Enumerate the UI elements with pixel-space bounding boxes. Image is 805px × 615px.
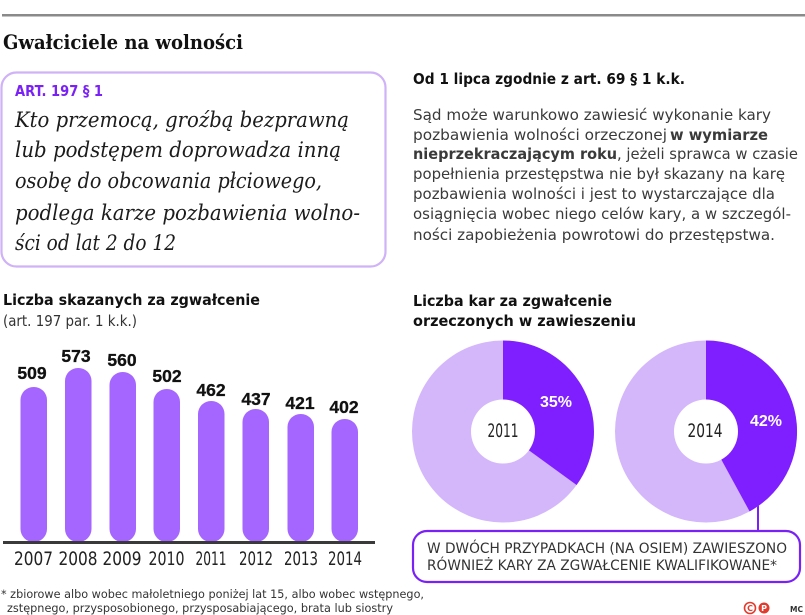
bar values: 402 (329, 397, 359, 417)
pie chart 2011 (412, 340, 594, 522)
text block: art. 69 explanation: ności zapobieżenia powrotowi do przestępstwa. (413, 226, 775, 244)
bar 2013 (288, 414, 314, 542)
bar values (17, 346, 359, 417)
pie chart 2014 (615, 340, 797, 522)
footnote: zstępnego, przysposobionego, przysposabiającego, brata lub siostry (7, 601, 393, 615)
year labels: 2007 (14, 549, 53, 570)
heading: pie charts: orzeczonych w zawieszeniu (413, 312, 636, 330)
title: Gwałciciele na wolności (3, 30, 243, 54)
footnote (1, 587, 424, 615)
label 2014: 2014 (688, 421, 722, 442)
bar values: 560 (107, 350, 137, 370)
icon: copyright marks: P (761, 604, 767, 613)
year labels: 2010 (148, 549, 184, 570)
label 42%: 42% (750, 413, 782, 430)
article text: lub podstępem doprowadza inną (15, 138, 341, 163)
year labels (14, 549, 362, 570)
footnote: * zbiorowe albo wobec małoletniego poniżej lat 15, albo wobec wstępnego, (1, 587, 424, 601)
callout: W DWÓCH PRZYPADKACH (NA OSIEM) ZAWIESZONO (427, 539, 787, 557)
bar values: 421 (285, 393, 315, 413)
connector line (757, 505, 759, 532)
heading: pie charts (413, 292, 636, 330)
heading: bar chart (3, 291, 260, 330)
bar values: 573 (61, 346, 91, 366)
panel: article 197 (2, 72, 386, 266)
bar values: 462 (196, 380, 226, 400)
article label: ART. 197 § 1 (15, 82, 103, 100)
bar values: 502 (152, 366, 182, 386)
article text: Kto przemocą, groźbą bezprawną (14, 108, 349, 133)
text block: art. 69 explanation: w wymiarze (670, 126, 768, 144)
bar 2011 (198, 401, 224, 542)
bar 2007 (20, 387, 47, 542)
year labels: 2013 (284, 549, 318, 570)
text block: art. 69 explanation (413, 106, 798, 244)
year labels: 2012 (239, 549, 273, 570)
article text: ści od lat 2 do 12 (15, 231, 176, 256)
text block: art. 69 explanation: nieprzekraczającym roku (413, 145, 617, 163)
article text: podlega karze pozbawienia wolno- (15, 201, 360, 226)
bar 2012 (242, 409, 269, 542)
text block: art. 69 explanation: osiągnięcia wobec niego celów kary, a w szczegól- (413, 205, 791, 223)
bar 2008 (65, 368, 92, 542)
text block: art. 69 explanation: popełnienia przestępstwa nie był skazany na karę (413, 165, 785, 183)
bar values: 437 (241, 389, 271, 409)
text block: art. 69 explanation: pozbawienia wolności orzeczonej (413, 126, 667, 144)
text block: art. 69 explanation: Sąd może warunkowo zawiesić wykonanie kary (413, 106, 771, 124)
heading: art. 69: Od 1 lipca zgodnie z art. 69 § 1 k.k. (413, 70, 685, 88)
year labels: 2011 (196, 549, 226, 570)
article text (14, 108, 360, 256)
icon: copyright marks (744, 602, 770, 614)
bar 2010 (154, 389, 180, 542)
bar values: 509 (17, 363, 47, 383)
heading: bar chart: Liczba skazanych za zgwałcenie (3, 291, 260, 309)
label 35%: 35% (540, 394, 572, 411)
year labels: 2014 (328, 549, 362, 570)
icon: copyright marks: C (747, 604, 753, 613)
text block: art. 69 explanation: , jeżeli sprawca w czasie (617, 145, 798, 163)
callout: RÓWNIEŻ KARY ZA ZGWAŁCENIE KWALIFIKOWANE* (427, 556, 777, 574)
bar 2009 (110, 372, 136, 542)
year labels: 2008 (58, 549, 98, 570)
bar 2014 (332, 419, 358, 542)
bar chart (3, 346, 375, 570)
callout (413, 531, 800, 582)
heading: pie charts: Liczba kar za zgwałcenie (413, 292, 612, 310)
article text: osobę do obcowania płciowego, (15, 169, 322, 194)
heading: bar chart: (art. 197 par. 1 k.k.) (3, 312, 137, 330)
year labels: 2009 (102, 549, 142, 570)
author initials: MC (790, 605, 803, 614)
text block: art. 69 explanation: pozbawienia wolności i jest to wystarczające dla (413, 185, 775, 203)
label 2011: 2011 (488, 421, 518, 442)
